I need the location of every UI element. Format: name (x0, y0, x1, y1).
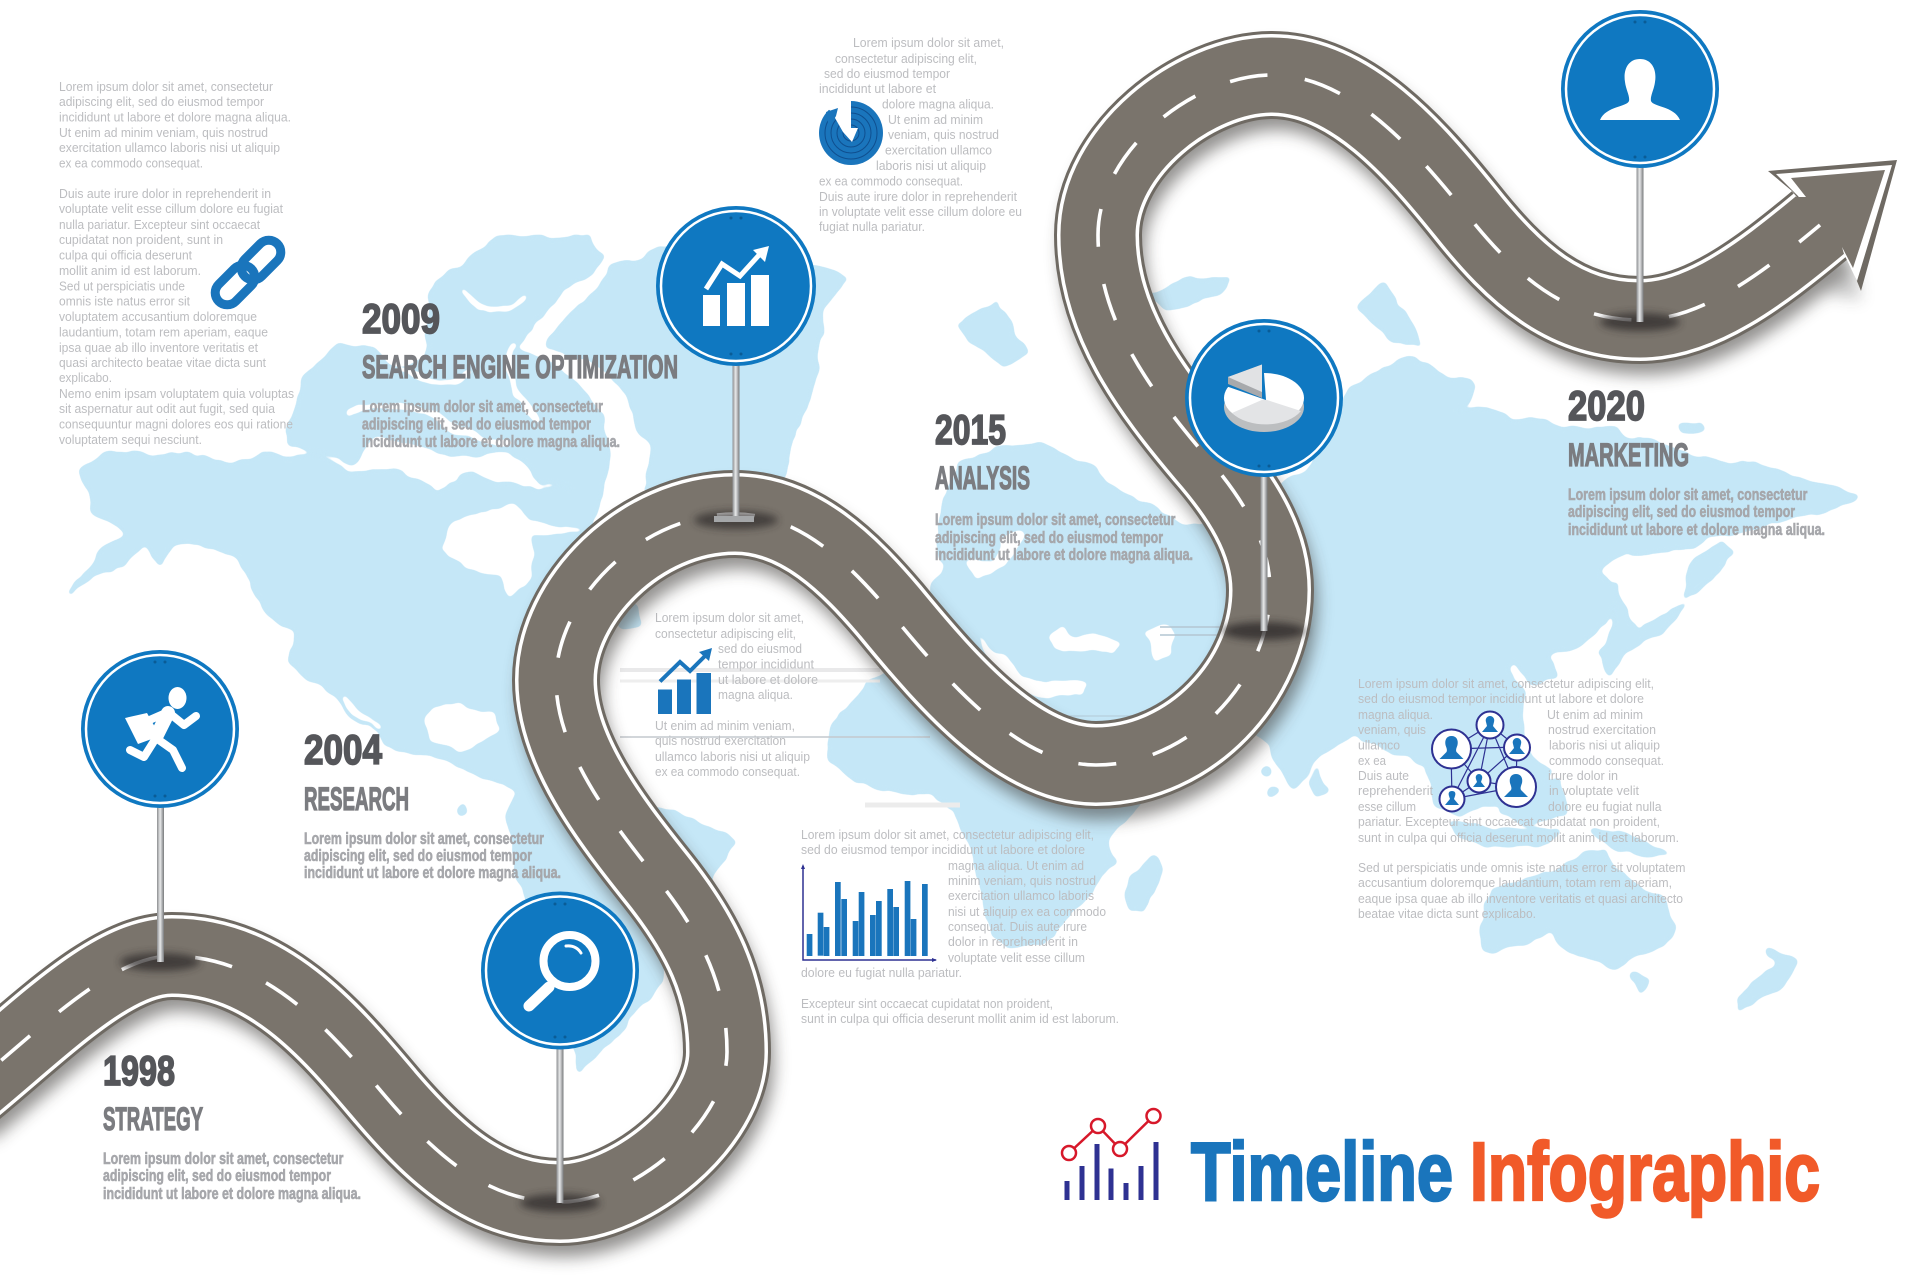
icon: radial target chart (816, 99, 883, 165)
heading: 1998 strategy: 1998 (103, 1047, 175, 1094)
text block: right lorem ipsum: Sed ut perspiciatis unde omnis iste natus error sit voluptatem (1358, 861, 1686, 875)
text block: beside bar chart: minim veniam, quis nostrud (948, 874, 1096, 888)
heading: 2009 search engine optimization: incididunt ut labore et dolore magna aliqua. (362, 433, 620, 451)
map: inner loop islet (615, 600, 640, 628)
text block: top centre lorem ipsum: fugiat nulla pariatur. (819, 220, 925, 234)
heading: 2009 search engine optimization (362, 295, 678, 451)
sign 5: marketing (1561, 10, 1719, 331)
text block: top centre lorem ipsum: incididunt ut labore et (819, 82, 937, 96)
heading: 1998 strategy: Lorem ipsum dolor sit amet, consectetur (103, 1150, 344, 1168)
text block: top left lorem ipsum: consequuntur magni dolores eos qui ratione (59, 418, 293, 432)
heading: 2015 analysis: adipiscing elit, sed do eiusmod tempor (935, 529, 1163, 547)
text block: top left lorem ipsum: explicabo. (59, 371, 112, 385)
text block: beside bar chart: magna aliqua. Ut enim ad (948, 859, 1084, 873)
text block: top left lorem ipsum: mollit anim id est laborum. (59, 264, 201, 278)
heading: 2004 research: Lorem ipsum dolor sit amet, consectetur (304, 830, 544, 848)
map: land masses (68, 238, 1855, 1070)
text block: top left lorem ipsum: laudantium, totam rem aperiam, eaque (59, 326, 268, 340)
text block: top left lorem ipsum: omnis iste natus error sit (59, 294, 190, 308)
text block: right lorem ipsum: irure dolor in (1548, 769, 1618, 783)
text block: top left lorem ipsum: voluptatem accusantium doloremque (59, 310, 257, 324)
text block: inside road loop: magna aliqua. (718, 688, 793, 702)
text block: beside bar chart: consequat. Duis aute irure (948, 920, 1087, 934)
heading: 2015 analysis (935, 406, 1193, 564)
title: Timeline (1191, 1125, 1453, 1218)
icon: running man (125, 687, 196, 768)
heading: 2015 analysis: ANALYSIS (935, 460, 1030, 496)
heading: 2020 marketing (1568, 382, 1825, 539)
heading: 2009 search engine optimization: SEARCH ENGINE OPTIMIZATION (362, 349, 678, 385)
map: Mediterranean (977, 638, 1087, 693)
heading: 2020 marketing: incididunt ut labore et dolore magna aliqua. (1568, 521, 1825, 539)
heading: 2004 research (304, 726, 561, 882)
heading: 2004 research: 2004 (304, 726, 383, 773)
text block: right lorem ipsum: dolore eu fugiat nulla (1548, 800, 1662, 814)
map: South America (508, 783, 735, 1070)
heading: 2015 analysis: 2015 (935, 406, 1006, 453)
text block: top centre lorem ipsum: Lorem ipsum dolor sit amet, (853, 36, 1004, 50)
text block: top centre lorem ipsum: dolore magna aliqua. (882, 98, 994, 112)
text block: top left lorem ipsum: exercitation ullamco laboris nisi ut aliquip (59, 141, 280, 155)
heading: 2020 marketing: adipiscing elit, sed do eiusmod tempor (1568, 503, 1795, 521)
sign 3: research (481, 892, 639, 1212)
text block: right lorem ipsum (1358, 677, 1686, 921)
text block: right lorem ipsum: sed do eiusmod tempor incididunt ut labore et dolore (1358, 692, 1644, 706)
heading: 2020 marketing: 2020 (1568, 382, 1645, 429)
heading: 2009 search engine optimization: Lorem ipsum dolor sit amet, consectetur (362, 398, 603, 416)
text block: top left lorem ipsum: Nemo enim ipsam voluptatem quia voluptas (59, 387, 294, 401)
heading: 1998 strategy: incididunt ut labore et dolore magna aliqua. (103, 1185, 361, 1203)
text block: inside road loop (655, 611, 818, 779)
text block: top left lorem ipsum: ex ea commodo consequat. (59, 156, 203, 170)
heading: 1998 strategy: adipiscing elit, sed do eiusmod tempor (103, 1167, 331, 1185)
text block: top left lorem ipsum (59, 80, 294, 447)
map: Gulf of Mexico (426, 704, 499, 748)
text block: inside road loop: sed do eiusmod (718, 642, 802, 656)
heading: 1998 strategy: STRATEGY (103, 1101, 203, 1137)
text block: beside bar chart: exercitation ullamco laboris (948, 889, 1094, 903)
text block: beside bar chart: dolore eu fugiat nulla pariatur. (801, 966, 962, 980)
sign 2: search engine optimization (656, 206, 816, 529)
text block: right lorem ipsum: in voluptate velit (1549, 784, 1640, 798)
heading: 2004 research: adipiscing elit, sed do eiusmod tempor (304, 847, 532, 865)
text block: inside road loop: quis nostrud exercitation (655, 734, 786, 748)
map: Hudson Bay (442, 505, 580, 598)
text block: right lorem ipsum: ullamco (1358, 738, 1400, 752)
icon: logo chart (1062, 1109, 1160, 1200)
map: Caspian Sea (1145, 627, 1172, 660)
map: arctic channels (350, 292, 540, 445)
text block: top left lorem ipsum: Sed ut perspiciatis unde (59, 280, 185, 294)
text block: beside bar chart: voluptate velit esse cillum (948, 951, 1085, 965)
map: Greenland (549, 242, 845, 500)
text block: right lorem ipsum: Duis aute (1358, 769, 1409, 783)
text block: top left lorem ipsum: Duis aute irure dolor in reprehenderit in (59, 187, 271, 201)
text block: top left lorem ipsum: incididunt ut labore et dolore magna aliqua. (59, 110, 291, 124)
icon: magnifying glass (529, 935, 596, 1006)
faint horizontal streaks (620, 627, 1225, 805)
text block: top centre lorem ipsum: laboris nisi ut aliquip (876, 159, 986, 173)
icon: chain link (210, 235, 286, 310)
sign 4: analysis (1185, 319, 1343, 640)
icon: pie chart (1220, 360, 1304, 432)
text block: top centre lorem ipsum (819, 36, 1022, 234)
map: North America (68, 451, 620, 815)
text block: right lorem ipsum: pariatur. Excepteur sint occaecat cupidatat non proident, (1358, 815, 1660, 829)
heading: 1998 strategy (103, 1047, 361, 1203)
text block: beside bar chart (801, 828, 1119, 1026)
text block: top centre lorem ipsum: consectetur adipiscing elit, (835, 52, 977, 66)
text block: right lorem ipsum: magna aliqua. (1358, 708, 1433, 722)
map: Baltic (967, 533, 1023, 577)
map: seas and channels (340, 292, 1172, 748)
text block: top centre lorem ipsum: Ut enim ad minim (888, 113, 983, 127)
text block: inside road loop: Ut enim ad minim veniam, (655, 719, 795, 733)
text block: right lorem ipsum: Ut enim ad minim (1547, 708, 1643, 722)
text block: top left lorem ipsum: nulla pariatur. Excepteur sint occaecat (59, 218, 260, 232)
text block: top centre lorem ipsum: Duis aute irure dolor in reprehenderit (819, 190, 1018, 204)
text block: right lorem ipsum: nostrud exercitation (1548, 723, 1656, 737)
bar chart (801, 864, 937, 962)
icon: people network (1432, 712, 1536, 812)
text block: top centre lorem ipsum: sed do eiusmod tempor (824, 67, 950, 81)
map: Baja California (340, 696, 379, 732)
heading: 2015 analysis: incididunt ut labore et dolore magna aliqua. (935, 546, 1193, 564)
map: islands and Australia (458, 278, 1798, 1009)
text block: right lorem ipsum: esse cillum (1358, 800, 1416, 814)
text block: top left lorem ipsum: voluptate velit esse cillum dolore eu fugiat (59, 202, 283, 216)
title (1191, 1125, 1820, 1218)
icon: small growth bar chart (658, 648, 712, 714)
text block: right lorem ipsum: beatae vitae dicta sunt explicabo. (1358, 907, 1536, 921)
text block: inside road loop: consectetur adipiscing elit, (655, 627, 796, 641)
text block: inside road loop: ex ea commodo consequat. (655, 765, 800, 779)
text block: top centre lorem ipsum: in voluptate velit esse cillum dolore eu (819, 205, 1022, 219)
text block: right lorem ipsum: sunt in culpa qui officia deserunt mollit anim id est laborum. (1358, 831, 1679, 845)
text block: right lorem ipsum: eaque ipsa quae ab illo inventore veritatis et quasi architecto (1358, 892, 1683, 906)
heading: 2020 marketing: Lorem ipsum dolor sit amet, consectetur (1568, 486, 1808, 504)
heading: 2004 research: RESEARCH (304, 781, 409, 817)
text block: top left lorem ipsum: adipiscing elit, sed do eiusmod tempor (59, 95, 264, 109)
text block: beside bar chart: sunt in culpa qui officia deserunt mollit anim id est laborum. (801, 1012, 1119, 1026)
sign 1: strategy (81, 650, 239, 971)
text block: top left lorem ipsum: quasi architecto beatae vitae dicta sunt (59, 356, 267, 370)
icon: growth chart (703, 246, 769, 326)
text block: beside bar chart: sed do eiusmod tempor incididunt ut labore et dolore (801, 843, 1085, 857)
text block: top left lorem ipsum: sit aspernatur aut odit aut fugit, sed quia (59, 402, 275, 416)
map: Eurasia and Africa (827, 359, 1855, 947)
text block: beside bar chart: dolor in reprehenderit in (948, 935, 1078, 949)
world map background (68, 238, 1855, 1070)
text block: top left lorem ipsum: voluptatem sequi nesciunt. (59, 433, 202, 447)
text block: beside bar chart: Lorem ipsum dolor sit amet, consectetur adipiscing elit, (801, 828, 1094, 842)
text block: top left lorem ipsum: ipsa quae ab illo inventore veritatis et (59, 341, 258, 355)
text block: top left lorem ipsum: Ut enim ad minim veniam, quis nostrud (59, 126, 268, 140)
heading: 2015 analysis: Lorem ipsum dolor sit amet, consectetur (935, 511, 1176, 529)
text block: top centre lorem ipsum: veniam, quis nostrud (888, 128, 999, 142)
text block: right lorem ipsum: ex ea (1358, 754, 1386, 768)
title: Infographic (1470, 1125, 1820, 1218)
text block: top centre lorem ipsum: ex ea commodo consequat. (819, 174, 963, 188)
text block: right lorem ipsum: laboris nisi ut aliquip (1549, 738, 1660, 752)
heading: 2004 research: incididunt ut labore et dolore magna aliqua. (304, 864, 561, 882)
text block: beside bar chart: nisi ut aliquip ex ea commodo (948, 905, 1106, 919)
text block: inside road loop: Lorem ipsum dolor sit amet, (655, 611, 804, 625)
text block: right lorem ipsum: reprehenderit (1358, 784, 1434, 798)
text block: beside bar chart: Excepteur sint occaecat cupidatat non proident, (801, 997, 1053, 1011)
heading: 2009 search engine optimization: adipiscing elit, sed do eiusmod tempor (362, 416, 591, 434)
text block: right lorem ipsum: commodo consequat. (1549, 754, 1664, 768)
text block: top left lorem ipsum: culpa qui officia deserunt (59, 248, 193, 262)
map: Arctic islands (287, 238, 609, 487)
icon: person (1600, 59, 1680, 120)
text block: top left lorem ipsum: Lorem ipsum dolor sit amet, consectetur (59, 80, 273, 94)
text block: inside road loop: ut labore et dolore (718, 673, 818, 687)
text block: right lorem ipsum: Lorem ipsum dolor sit amet, consectetur adipiscing elit, (1358, 677, 1654, 691)
text block: right lorem ipsum: accusantium doloremque laudantium, totam rem aperiam, (1358, 876, 1672, 890)
map: Black Sea (1050, 627, 1117, 653)
heading: 2009 search engine optimization: 2009 (362, 295, 440, 342)
text block: top centre lorem ipsum: exercitation ullamco (885, 144, 992, 158)
text block: inside road loop: tempor incididunt (718, 658, 815, 672)
heading: 2020 marketing: MARKETING (1568, 437, 1689, 473)
arrow head (1768, 160, 1897, 291)
text block: inside road loop: ullamco laboris nisi ut aliquip (655, 750, 810, 764)
text block: right lorem ipsum: veniam, quis (1358, 723, 1426, 737)
text block: top left lorem ipsum: cupidatat non proident, sunt in (59, 233, 223, 247)
